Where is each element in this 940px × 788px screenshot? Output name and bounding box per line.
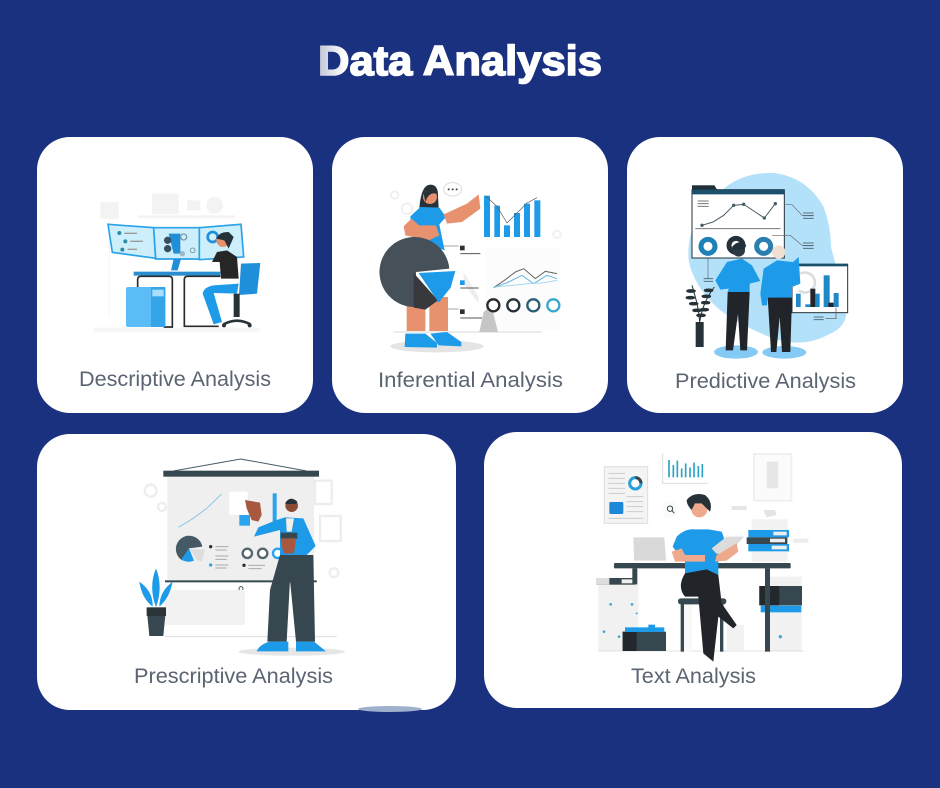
illustration: two people viewing dashboards — [686, 173, 848, 359]
illustration: woman presenting charts — [379, 183, 561, 352]
illustration: man at desk with documents — [596, 453, 808, 662]
label: Text Analysis — [631, 665, 756, 688]
label: Predictive Analysis — [675, 370, 856, 393]
label: Descriptive Analysis — [79, 368, 271, 391]
panel: predictive analysis — [627, 137, 903, 413]
card background — [37, 434, 456, 710]
label: Prescriptive Analysis — [134, 665, 333, 688]
card background — [484, 432, 902, 708]
illustration: person at three monitors — [94, 194, 260, 332]
card background — [37, 137, 313, 413]
panel: inferential analysis — [332, 137, 608, 413]
panel: prescriptive analysis — [37, 434, 456, 712]
illustration: man at projection screen — [139, 459, 345, 656]
card background — [332, 137, 608, 413]
panel: text analysis — [484, 432, 902, 708]
card background — [627, 137, 903, 413]
title: Data Analysis — [318, 37, 602, 84]
label: Inferential Analysis — [378, 369, 563, 392]
bottom edge smudge — [358, 706, 422, 712]
panel: descriptive analysis — [37, 137, 313, 413]
